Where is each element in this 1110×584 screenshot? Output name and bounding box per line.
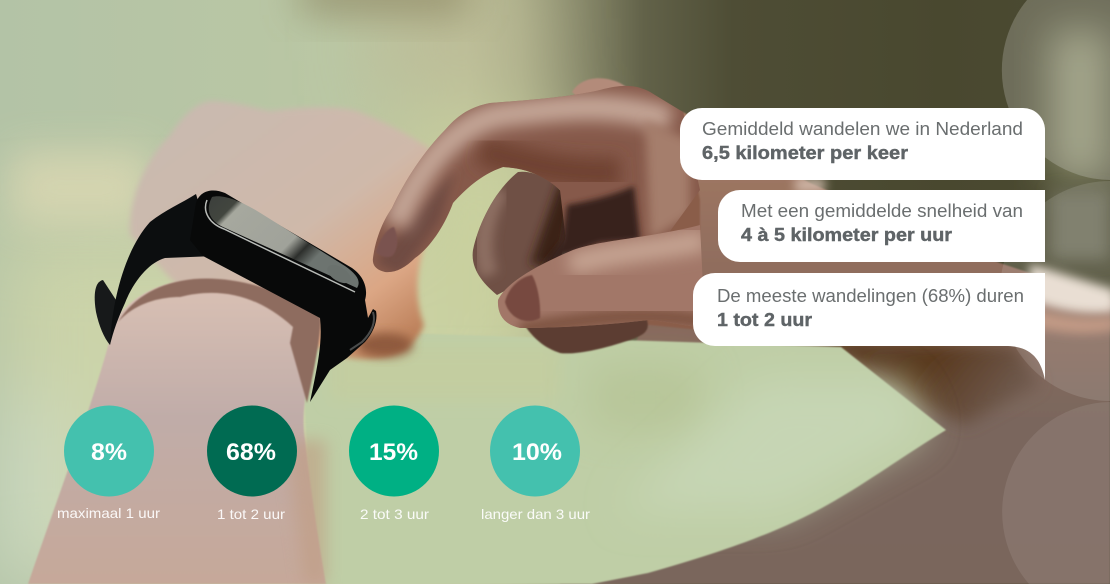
callout: average distance: Gemiddeld wandelen we in Nederland [702,119,1023,139]
scene: right forearm [560,112,1110,584]
scene: thumb nail [505,275,540,321]
scene: right hand [360,70,710,353]
stat: maximaal 1 uur [57,406,160,521]
scene: lower finger [525,320,648,353]
stat: 2 tot 3 uur: 15% [369,439,418,466]
callout: average distance: 6,5 kilometer per keer [702,143,908,163]
stat: langer dan 3 uur: 10% [512,439,562,466]
stat: maximaal 1 uur: maximaal 1 uur [57,505,160,521]
scene: hand base behind fingers [560,100,700,330]
scene: middle finger [472,172,565,295]
scene: left hand back [130,101,440,359]
stat: 1 tot 2 uur [207,406,297,522]
scene: index finger [372,86,700,272]
callout: average speed [718,190,1045,262]
callout: average speed: 4 à 5 kilometer per uur [741,225,952,245]
stat: 2 tot 3 uur [349,406,439,522]
scene: green patch of grass [303,330,946,584]
stat: 1 tot 2 uur: 68% [226,439,276,466]
stat: maximaal 1 uur: 8% [91,439,127,466]
callout: most common duration [693,273,1045,380]
scene: index fingernail [376,227,397,257]
callout: average distance [680,108,1045,180]
icon: fitness tracker watch [95,190,377,402]
callout: most common duration: De meeste wandelingen (68%) duren [717,286,1024,306]
stat: 1 tot 2 uur: 1 tot 2 uur [217,506,285,522]
stat: langer dan 3 uur [481,406,590,522]
scene: left forearm [28,278,326,584]
scene: finger knuckle behind [572,78,640,110]
stat: 2 tot 3 uur: 2 tot 3 uur [360,506,429,522]
scene: thumb [498,225,702,328]
callout: most common duration: 1 tot 2 uur [717,310,812,330]
scene: dark gap between fingers [540,186,640,268]
callout: average speed: Met een gemiddelde snelheid van [741,201,1023,221]
stat: langer dan 3 uur: langer dan 3 uur [481,506,590,522]
decorative translucent circles [1000,0,1110,584]
